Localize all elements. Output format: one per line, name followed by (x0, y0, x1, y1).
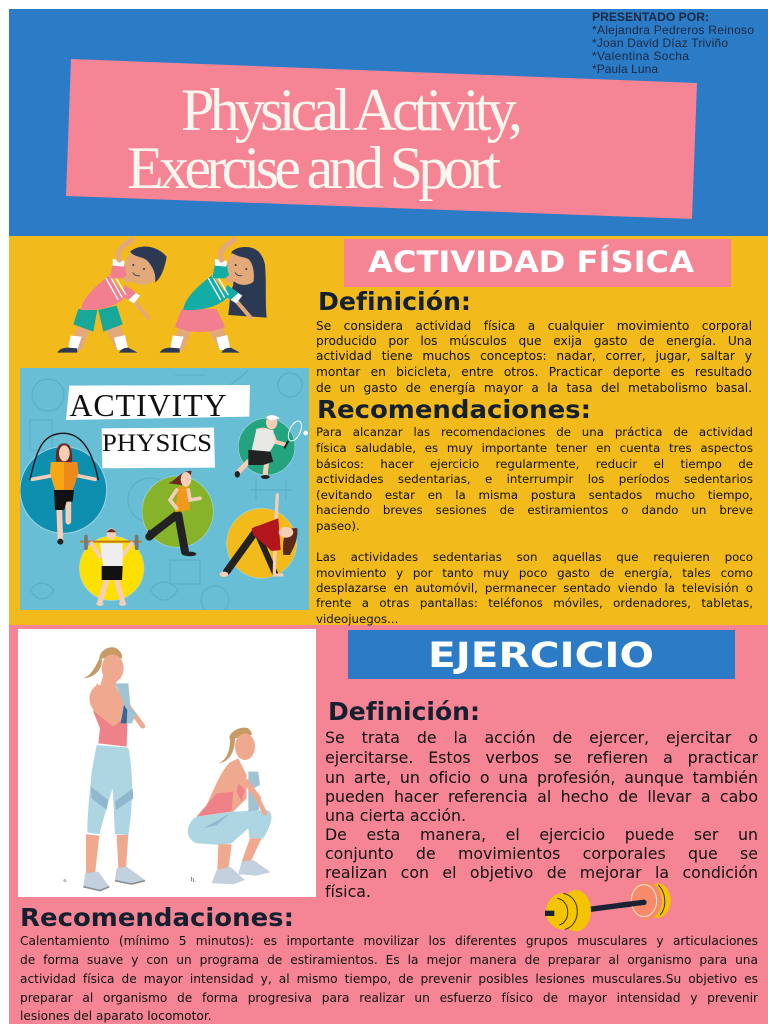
illustration: woman squat exercise: b. (191, 877, 196, 884)
squatting woman (188, 728, 271, 884)
icon: weightlifter (79, 528, 144, 606)
text block: definicion ejercicio (325, 728, 758, 901)
authors credit: *Valentina Socha (592, 49, 689, 63)
heading: definicion ejercicio: Definición: (328, 697, 480, 726)
heading: definicion actividad: Definición: (318, 287, 471, 316)
text block: definicion ejercicio: física. (325, 882, 371, 901)
heading box: ejercicio: EJERCICIO (428, 636, 654, 676)
text block: recomendaciones ejercicio (20, 934, 758, 1023)
illustration: two stretching children (57, 237, 267, 353)
panel: pink exercise section (9, 625, 768, 1024)
text block: recomendaciones actividad fisica: actividades sedentarias, e interrumpir los períodos sedentarios (316, 472, 753, 486)
icon: barbell (545, 882, 671, 932)
text block: recomendaciones actividad fisica: movimiento y por tanto muy poco gasto de energía, tales como (316, 566, 753, 580)
activity title labels: PHYSICS (102, 429, 212, 457)
text block: definicion actividad fisica (316, 319, 752, 395)
text block: definicion actividad fisica: Se considera actividad física a cualquier movimiento corporal (316, 319, 752, 333)
activity title labels: ACTIVITY (69, 387, 227, 423)
title text (127, 77, 523, 201)
text block: recomendaciones actividad fisica: física saludable, es muy importante tener en cuenta tres aspectos (316, 441, 753, 455)
panel: yellow physical activity section (9, 236, 768, 625)
title text: Exercise and Sport (127, 135, 501, 201)
text block: recomendaciones actividad fisica: básicos: hacer ejercicio regularmente, reducir el tiempo de (316, 457, 753, 471)
illustration: woman squat exercise (18, 629, 316, 897)
text block: recomendaciones ejercicio: actividad física de mayor intensidad y, al mismo tiempo, de prevenir posibles lesiones musculares.Su objetivo es (20, 972, 758, 986)
text block: recomendaciones actividad fisica: videojuegos... (316, 612, 398, 626)
authors credit: PRESENTADO POR: (592, 10, 709, 24)
text block: recomendaciones actividad fisica (316, 425, 753, 626)
text block: definicion actividad fisica: montar en bicicleta, entre otros. Practicar deporte es resultado (316, 365, 752, 379)
text block: recomendaciones ejercicio: de forma suave y con un programa de estiramientos. Es la mejor manera de preparar al organismo para una (20, 953, 758, 967)
panel: blue header (9, 9, 768, 236)
activity title labels (66, 385, 250, 468)
text block: recomendaciones actividad fisica: Para alcanzar las recomendaciones de una práctica de actividad (316, 425, 753, 439)
text block: recomendaciones ejercicio: lesiones del aparato locomotor. (20, 1009, 212, 1023)
text block: recomendaciones ejercicio: Calentamiento (mínimo 5 minutos): es importante movilizar los diferentes grupos musculares y articulaciones (20, 934, 758, 948)
authors credit (592, 10, 754, 76)
text block: recomendaciones actividad fisica: paseo). (316, 519, 360, 533)
standing woman (82, 647, 145, 891)
text block: definicion actividad fisica: actividad tiene muchos conceptos: nadar, correr, jugar, saltar y (316, 349, 752, 363)
boy (57, 240, 167, 353)
text block: definicion ejercicio: conjunto de movimientos corporales que se (325, 844, 758, 863)
text block: recomendaciones actividad fisica: desplazarse en automóvil, permanecer sentado viendo la televisión o (316, 581, 753, 595)
panel: activity physics illustration (20, 368, 309, 610)
authors credit: *Joan David Díaz Triviño (592, 36, 728, 50)
title text: Physical Activity, (181, 77, 523, 143)
icon: rope jumper (20, 433, 107, 545)
text block: recomendaciones actividad fisica: frente a otras pantallas: teléfonos móviles, ordenadores, tabletas, (316, 596, 753, 610)
text block: definicion ejercicio: una cierta acción. (325, 806, 466, 825)
text block: recomendaciones actividad fisica: Las actividades sedentarias son aquellas que requieren poco (316, 550, 753, 564)
title banner (66, 59, 697, 219)
text block: definicion ejercicio: un arte, un oficio o una profesión, aunque también (325, 768, 758, 787)
text block: recomendaciones ejercicio: preparar al organismo de forma progresiva para realizar un esfuerzo físico de mayor intensidad y prevenir (20, 991, 758, 1005)
text block: definicion actividad fisica: producido por los músculos que exija gasto de energía. Una (316, 334, 752, 348)
girl (160, 240, 267, 353)
text block: definicion ejercicio: pueden hacer referencia al hecho de llevar a cabo (325, 787, 758, 806)
icon: yoga woman (220, 495, 297, 578)
icon: tennis player (235, 415, 308, 479)
text block: definicion ejercicio: ejercitarse. Estos verbos se refieren a practicar (325, 748, 758, 767)
text block: recomendaciones actividad fisica: haciendo breves sesiones de estiramientos o dando un breve (316, 503, 753, 517)
text block: definicion ejercicio: De esta manera, el ejercicio puede ser un (325, 825, 758, 844)
heading box: actividad fisica (344, 239, 731, 287)
heading: recomendaciones actividad: Recomendaciones: (317, 395, 591, 424)
text block: definicion actividad fisica: de un gasto de energía mayor a la tasa del metabolismo basal. (316, 381, 752, 395)
authors credit: *Paula Luna (592, 62, 658, 76)
heading: recomendaciones ejercicio: Recomendaciones: (20, 903, 294, 932)
authors credit: *Alejandra Pedreros Reinoso (592, 23, 754, 37)
text block: recomendaciones actividad fisica: (evitando estar en la misma postura sentados mucho tiempo, (316, 488, 753, 502)
heading box: ejercicio (348, 630, 735, 679)
heading box: actividad fisica: ACTIVIDAD FÍSICA (368, 245, 695, 279)
text block: definicion ejercicio: realizan con el objetivo de mejorar la condición (325, 863, 758, 882)
illustration: woman squat exercise: a. (63, 878, 67, 884)
text block: definicion ejercicio: Se trata de la acción de ejercer, ejercitar o (325, 728, 758, 747)
icon: runner (142, 471, 213, 556)
